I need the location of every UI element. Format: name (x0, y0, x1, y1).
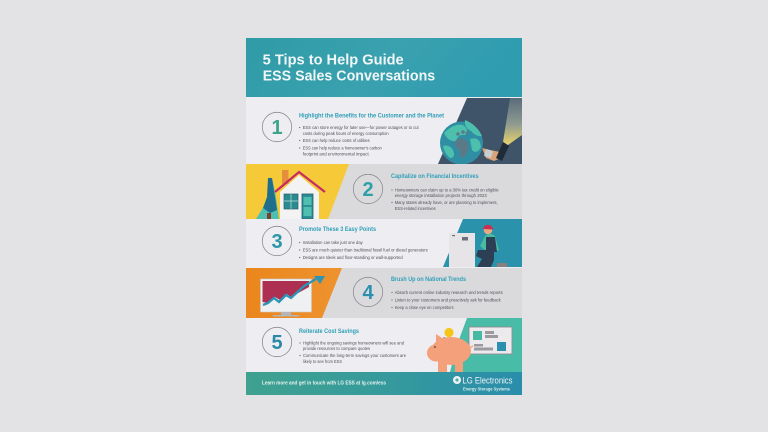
tip 5 bullets: Communicate the long-term savings your customers are (303, 353, 406, 358)
tip 3 bullets: Designs are sleek and floor-standing or wall-supported (303, 255, 403, 260)
teal illustration background (450, 318, 522, 372)
LG Electronics logo: Energy Storage Systems (463, 386, 510, 392)
tip 4 bullets: Absorb current online industry research and trends reports (395, 290, 503, 295)
LG Electronics logo (453, 376, 513, 392)
heading 2: Capitalize on Financial Incentives (391, 174, 479, 180)
tip 2 bullets (391, 188, 499, 211)
title (263, 52, 435, 84)
tip 1 bullets (299, 125, 419, 156)
tip 1 bullets: ESS can help reduce costs of utilities (303, 138, 370, 143)
number 3 badge: 3 (271, 231, 283, 253)
illustration: document card (469, 327, 512, 354)
illustration: piggy bank with coin (427, 328, 473, 372)
page sheet (246, 38, 522, 395)
title: 5 Tips to Help Guide (263, 52, 404, 68)
tip 2 bullets: energy storage installation projects through 2023 (395, 193, 487, 198)
number 3 badge (262, 226, 292, 256)
heading 4: Brush Up on National Trends (391, 277, 467, 283)
tip 4 bullets (391, 290, 503, 310)
header banner (246, 38, 522, 97)
tip 4 bullets: Keep a close eye on competitors (395, 305, 454, 310)
panel: tip 4 (246, 268, 522, 318)
number 5 badge: 5 (271, 332, 283, 354)
heading 5: Reiterate Cost Savings (299, 329, 360, 335)
footer call to action: Learn more and get in touch with LG ESS at lg.com/ess (262, 380, 386, 386)
panel: tip 5 (246, 318, 522, 372)
LG Electronics logo: LG Electronics (462, 376, 513, 386)
number 1 badge: 1 (271, 117, 283, 139)
illustration: globe in hand with flashlight (438, 98, 522, 164)
tip 3 bullets: Installation can take just one day (303, 240, 363, 245)
tip 2 bullets: ESS-related incentives (395, 206, 436, 211)
heading 1: Highlight the Benefits for the Customer and the Planet (299, 114, 444, 120)
tip 4 bullets: Listen to your customers and proactively ask for feedback (395, 298, 501, 302)
tip 5 bullets: likely to see from ESS (303, 359, 342, 364)
tip 1 bullets: costs during peak hours of energy consumption (303, 131, 389, 136)
panel: tip 1 (246, 97, 522, 164)
number 2 badge: 2 (362, 179, 374, 201)
footer band (246, 372, 522, 395)
title: ESS Sales Conversations (263, 68, 435, 84)
number 4 badge (353, 277, 383, 307)
tip 1 bullets: ESS can store energy for later use—for power outages or to cut (303, 125, 419, 130)
number 1 badge (262, 112, 292, 142)
tip 5 bullets: Highlight the ongoing savings homeowners will see and (303, 340, 404, 346)
tip 2 bullets: Many states already have, or are planning to implement, (395, 200, 498, 205)
tip 1 bullets: ESS can help reduce a homeowner's carbon (303, 146, 382, 151)
orange illustration background (246, 268, 342, 318)
tip 2 bullets: Homeowners can claim up to a 30% tax credit on eligible (395, 188, 499, 192)
teal illustration background (443, 219, 522, 267)
illustration: monitor with rising chart (260, 276, 325, 316)
panel: tip 3 (246, 219, 522, 268)
number 5 badge (262, 327, 292, 357)
tip 1 bullets: footprint and environmental impact (303, 152, 369, 156)
panel: tip 2 (246, 164, 522, 219)
tip 5 bullets (299, 340, 406, 364)
yellow illustration background (246, 164, 349, 219)
tip 5 bullets: provide resources to compare quotes (303, 346, 371, 351)
tip 3 bullets: ESS are much quieter than traditional fossil fuel or diesel generators (303, 248, 428, 253)
number 4 badge: 4 (362, 282, 374, 304)
tip 3 bullets (299, 240, 428, 260)
heading 3: Promote These 3 Easy Points (299, 227, 377, 233)
number 2 badge (353, 174, 383, 204)
illustration: house with tree (256, 170, 325, 219)
illustration: technician installing ESS box (449, 225, 507, 267)
